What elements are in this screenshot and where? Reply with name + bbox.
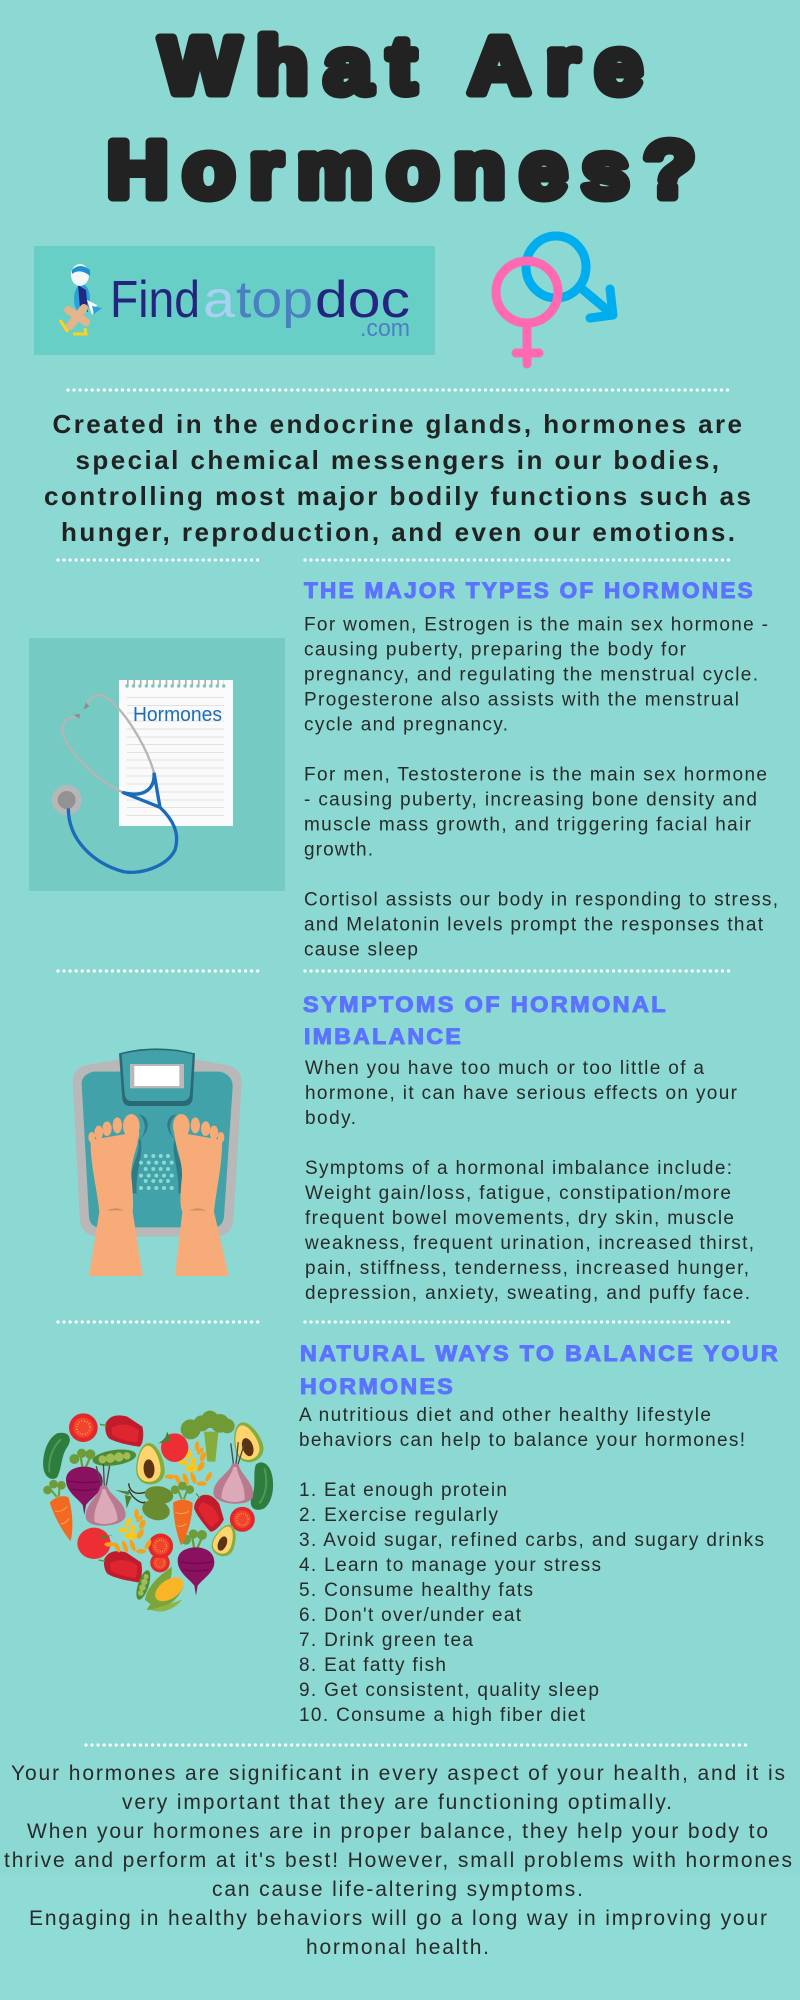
heading xyxy=(303,992,668,1049)
intro paragraph: Created in the endocrine glands, hormones are xyxy=(52,409,742,439)
heading: THE MAJOR TYPES OF HORMONES xyxy=(304,578,755,603)
body text: depression, anxiety, sweating, and puffy face. xyxy=(305,1283,750,1304)
icon: notepad xyxy=(119,680,233,826)
body text: For men, Testosterone is the main sex hormone xyxy=(304,764,767,786)
logo wordmark: Find xyxy=(110,271,200,329)
broccoli xyxy=(181,1411,235,1462)
numbered list: 3. Avoid sugar, refined carbs, and sugary drinks xyxy=(299,1530,764,1551)
divider xyxy=(86,1743,746,1747)
closing paragraph xyxy=(4,1762,792,1959)
body text: weakness, frequent urination, increased thirst, xyxy=(304,1233,754,1254)
icon: notepad: Hormones xyxy=(133,704,222,726)
closing paragraph: hormonal health. xyxy=(306,1936,489,1959)
panel: stethoscope illustration xyxy=(29,638,285,891)
body text: growth. xyxy=(304,840,373,860)
closing paragraph: Engaging in healthy behaviors will go a long way in improving your xyxy=(29,1907,767,1930)
title: What Are xyxy=(160,21,642,110)
intro paragraph: special chemical messengers in our bodies, xyxy=(76,445,719,475)
right foot xyxy=(173,1114,229,1276)
numbered list: 2. Exercise regularly xyxy=(299,1505,498,1526)
body text: Weight gain/loss, fatigue, constipation/more xyxy=(305,1183,731,1204)
body text: cause sleep xyxy=(304,940,418,960)
logo wordmark: a xyxy=(203,271,235,329)
numbered list: 7. Drink green tea xyxy=(299,1630,473,1651)
beets xyxy=(66,1449,214,1596)
corn xyxy=(145,1567,188,1612)
garlic bulbs xyxy=(82,1441,257,1527)
body text: pain, stiffness, tenderness, increased hunger, xyxy=(305,1258,749,1279)
numbered list: 6. Don't over/under eat xyxy=(299,1605,522,1626)
closing paragraph: When your hormones are in proper balance, they help your body to xyxy=(27,1820,768,1843)
body text: Progesterone also assists with the menstrual xyxy=(304,690,739,710)
body text: pregnancy, and regulating the menstrual cycle. xyxy=(304,664,758,686)
logo wordmark: top xyxy=(236,271,313,329)
numbered list: 5. Consume healthy fats xyxy=(299,1580,533,1601)
left foot xyxy=(88,1114,143,1276)
heading xyxy=(300,1341,780,1399)
intro paragraph xyxy=(44,409,751,547)
logo wordmark xyxy=(110,271,410,342)
title xyxy=(107,21,695,214)
body text: For women, Estrogen is the main sex hormone - xyxy=(304,614,768,636)
body text xyxy=(299,1405,745,1451)
intro paragraph: controlling most major bodily functions such as xyxy=(44,481,751,511)
peppers xyxy=(99,1415,231,1582)
body text: frequent bowel movements, dry skin, muscle xyxy=(305,1208,734,1229)
icon: gender symbols xyxy=(496,236,613,364)
cucumbers xyxy=(39,1430,273,1510)
golden wheat sprigs xyxy=(104,1441,213,1554)
intro paragraph: hunger, reproduction, and even our emotions. xyxy=(61,517,735,547)
numbered list: 9. Get consistent, quality sleep xyxy=(299,1680,599,1701)
section: natural ways to balance your hormones xyxy=(299,1341,780,1726)
avocados xyxy=(134,1418,267,1560)
logo wordmark: doc xyxy=(315,271,410,329)
logo panel: Findatopdoc xyxy=(34,246,435,355)
body text: behaviors can help to balance your hormones! xyxy=(299,1430,745,1451)
icon: stethoscope xyxy=(52,695,177,872)
body text: body. xyxy=(305,1108,356,1129)
apples xyxy=(77,1432,188,1559)
body text xyxy=(304,1058,754,1304)
body text: A nutritious diet and other healthy lifestyle xyxy=(299,1405,711,1426)
numbered list xyxy=(299,1480,764,1726)
title: Hormones? xyxy=(107,125,695,214)
icon: feet on bathroom scale xyxy=(73,1048,242,1276)
icon: female symbol xyxy=(496,261,558,364)
dividers xyxy=(58,558,729,562)
section: major types of hormones xyxy=(304,578,778,960)
scale dots xyxy=(139,1154,174,1190)
tomato slices xyxy=(69,1413,255,1572)
body text: When you have too much or too little of a xyxy=(305,1058,704,1079)
dividers xyxy=(58,1320,729,1324)
pea pods xyxy=(91,1447,153,1601)
section: symptoms of hormonal imbalance xyxy=(303,992,754,1304)
olives xyxy=(115,1483,174,1523)
body text: - causing puberty, increasing bone density and xyxy=(304,790,757,810)
body text: causing puberty, preparing the body for xyxy=(304,640,687,660)
body text: hormone, it can have serious effects on your xyxy=(305,1083,738,1104)
closing paragraph: thrive and perform at it's best! However, small problems with hormones xyxy=(4,1849,792,1872)
body text: muscle mass growth, and triggering facial hair xyxy=(304,814,752,836)
body text: Symptoms of a hormonal imbalance include: xyxy=(305,1158,732,1179)
body text xyxy=(304,614,778,960)
icon: heart of vegetables xyxy=(39,1411,273,1612)
footprints on scale xyxy=(130,1114,185,1193)
numbered list: 1. Eat enough protein xyxy=(299,1480,507,1501)
numbered list: 4. Learn to manage your stress xyxy=(299,1555,601,1576)
closing paragraph: very important that they are functioning optimally. xyxy=(122,1791,672,1814)
heading: IMBALANCE xyxy=(304,1024,463,1049)
body text: cycle and pregnancy. xyxy=(304,714,508,736)
dividers xyxy=(58,969,729,973)
icon: bird mascot xyxy=(60,264,102,334)
icon: male symbol xyxy=(526,236,613,318)
numbered list: 10. Consume a high fiber diet xyxy=(299,1705,586,1726)
heading: NATURAL WAYS TO BALANCE YOUR xyxy=(300,1341,780,1366)
divider xyxy=(68,388,729,392)
heading: SYMPTOMS OF HORMONAL xyxy=(303,992,668,1017)
heading: HORMONES xyxy=(300,1374,455,1399)
carrots xyxy=(41,1477,194,1546)
body text: Cortisol assists our body in responding to stress, xyxy=(304,890,778,910)
closing paragraph: Your hormones are significant in every aspect of your health, and it is xyxy=(11,1762,785,1785)
logo wordmark: .com xyxy=(360,315,410,342)
closing paragraph: can cause life-altering symptoms. xyxy=(212,1878,583,1901)
numbered list: 8. Eat fatty fish xyxy=(299,1655,446,1676)
body text: and Melatonin levels prompt the responses that xyxy=(304,914,764,936)
